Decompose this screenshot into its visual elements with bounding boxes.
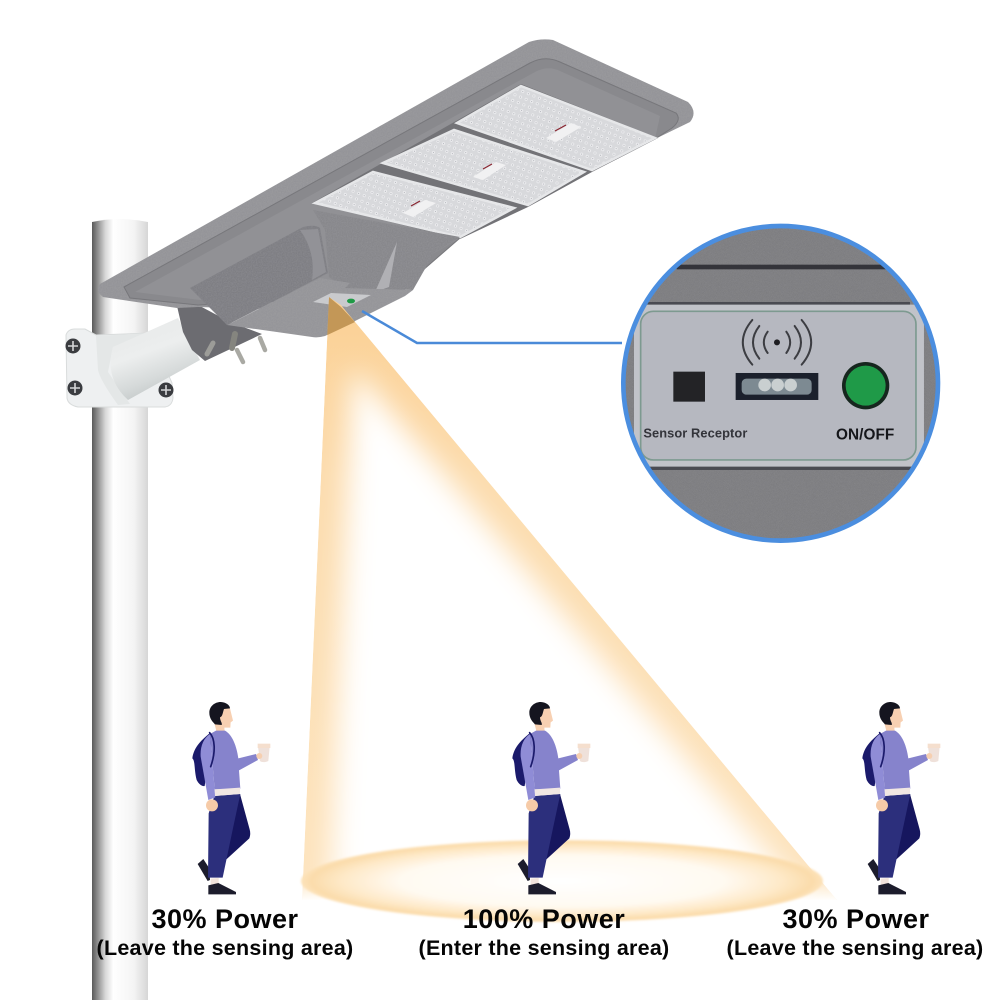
lens ring [623,226,938,541]
indicator glow [742,379,812,395]
power button dot [347,299,355,303]
lens contents [626,228,936,538]
power level right: 30% Power [782,904,930,934]
on/off button [842,362,889,409]
panel wire [555,125,566,131]
power level centre: 100% Power [463,904,625,934]
caption right [727,904,983,960]
icon: screw right [158,382,174,398]
bracket clamp [66,329,174,407]
button face [846,366,886,406]
mounting arm [111,318,200,400]
bolt centre upper [232,334,235,348]
beam white core [330,368,808,900]
lamp inner slope [124,59,678,305]
magnified sensor callout [620,220,953,553]
light beam [295,297,840,901]
clamp body [66,329,173,407]
power level left: 30% Power [151,904,299,934]
housing surface [626,228,936,538]
ground light pool [301,840,823,922]
panel driver label [403,200,436,217]
bolt centre lower [237,350,243,362]
plate top shadow [647,302,910,305]
plate inner border [641,311,916,460]
indicator LEDs [758,379,797,391]
bolt right [260,338,265,350]
label: on/off: ON/OFF [836,426,894,443]
LED panel right [457,86,655,170]
battery box bottom [227,278,413,337]
sensing note left: (Leave the sensing area) [97,936,353,960]
sensor receptor window [673,372,705,402]
sensor dot [774,339,780,345]
person right [862,702,940,894]
arm end plate [177,305,262,361]
lamp outer tray [98,39,694,310]
battery box side [190,226,328,325]
panel wire [483,164,492,169]
LED panel left [315,172,514,237]
neck fin [375,242,397,292]
sensing note right: (Leave the sensing area) [727,936,983,960]
beam bottom fade [302,884,837,900]
icon: screw bottom [68,380,82,396]
indicator window [736,373,818,400]
panel driver label [546,123,581,142]
person centre [512,702,590,894]
plate bottom shadow [650,466,912,470]
panel wire [411,201,420,206]
battery box highlight [300,229,326,280]
label: sensor receptor: Sensor Receptor [643,425,747,440]
caption left [97,904,353,960]
housing seam [677,265,890,269]
sensor plate on lamp [313,293,371,307]
beam over lamp body [327,297,355,335]
caption centre [419,904,669,960]
lamp neck [313,210,460,290]
bolt left [207,343,213,354]
solar lamp head [98,39,694,337]
lamp slope step [135,68,660,300]
sensor plate [634,305,924,467]
bolts [207,334,265,362]
pole [92,219,148,1000]
sensing note centre: (Enter the sensing area) [419,936,669,960]
icon: wireless sensor waves [743,320,811,365]
panel driver label [473,162,506,180]
LED panel rails [312,84,658,239]
callout line [362,311,622,343]
clamp collar [96,333,150,405]
person left [192,702,270,894]
beam base colour [302,297,837,900]
LED panel middle [383,130,584,205]
icon: screw top [66,338,80,354]
